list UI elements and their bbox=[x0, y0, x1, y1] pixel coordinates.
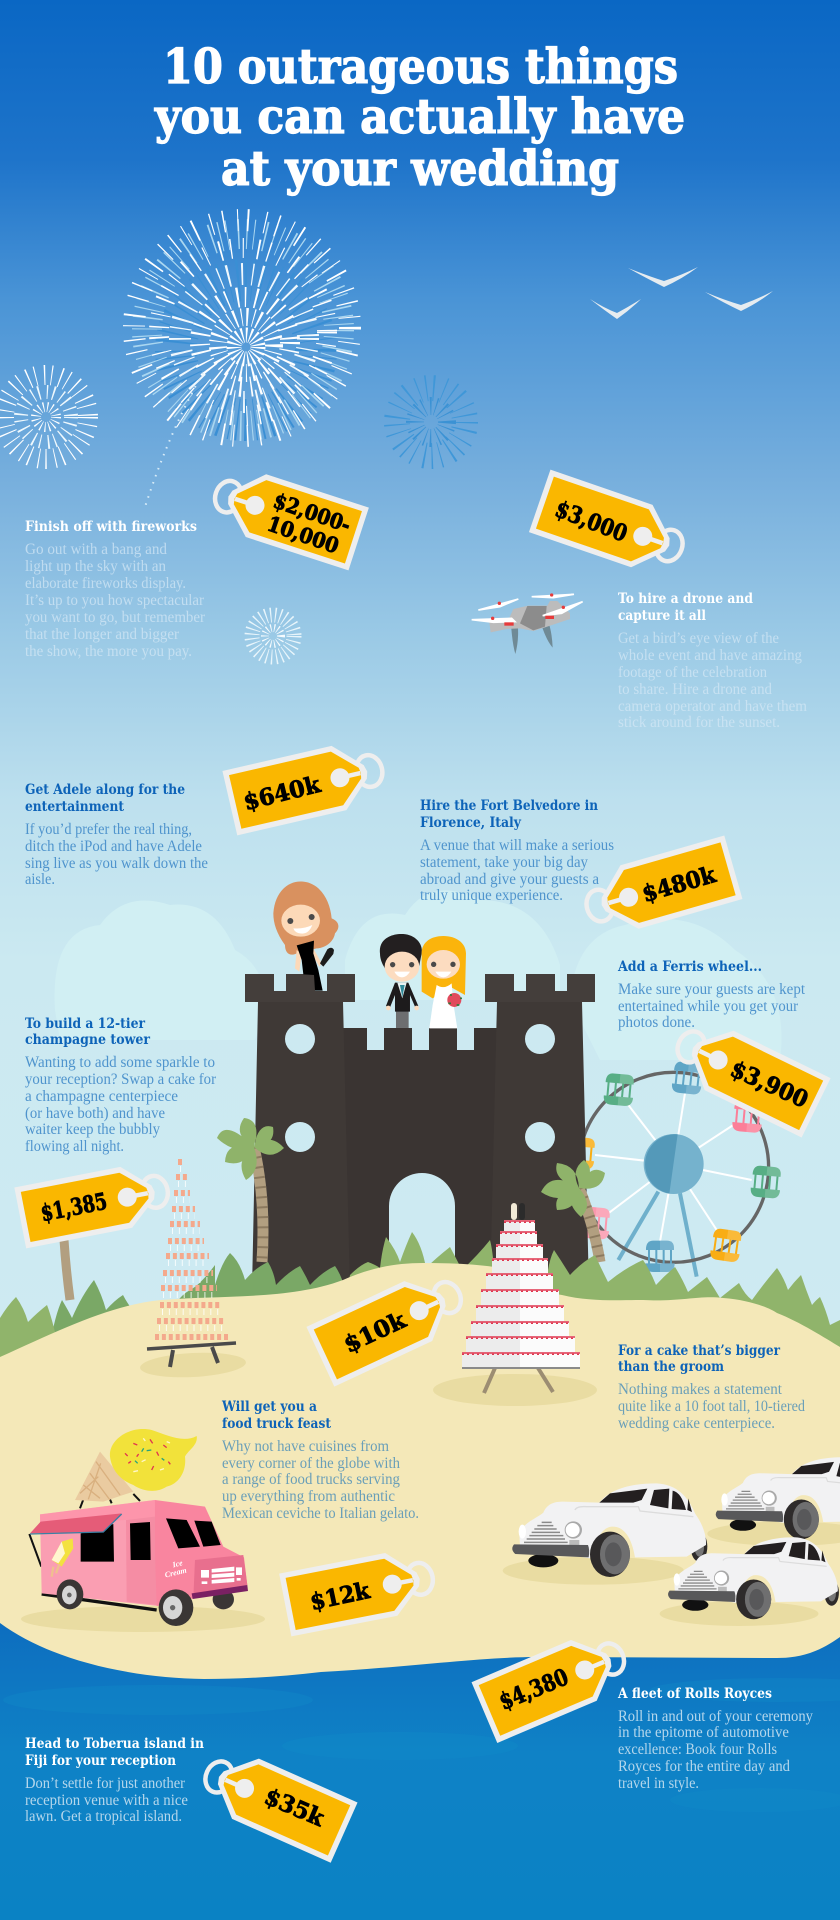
text block: Fort Belvedore: statement, take your big day bbox=[420, 854, 588, 871]
text block: drone: whole event and have amazing bbox=[618, 647, 802, 664]
price tag: food truck: $12k bbox=[308, 1577, 373, 1616]
text block: Fort Belvedore: A venue that will make a serious bbox=[420, 837, 614, 854]
text block: food truck bbox=[221, 1399, 419, 1522]
price tag: Toberua island: $35k bbox=[260, 1783, 329, 1832]
groom bbox=[380, 934, 422, 1028]
title bbox=[154, 39, 685, 197]
price tag: drone: $3,000 bbox=[551, 495, 631, 548]
title: you can actually have bbox=[154, 89, 685, 145]
text block: fireworks: It’s up to you how spectacular bbox=[25, 592, 205, 609]
price tag: cake bbox=[306, 1262, 473, 1387]
sand island bbox=[0, 1263, 840, 1679]
text block: drone: To hire a drone and bbox=[618, 591, 754, 607]
text block: fireworks: elaborate fireworks display. bbox=[25, 575, 186, 592]
text block: Ferris wheel bbox=[617, 959, 806, 1031]
price tag: champagne: $1,385 bbox=[38, 1188, 109, 1227]
price tag: Fort Belvedore bbox=[578, 836, 742, 941]
Adele bbox=[273, 881, 338, 991]
text block: Ferris wheel: Add a Ferris wheel... bbox=[617, 959, 762, 975]
text block: drone: capture it all bbox=[618, 608, 706, 624]
text block: Fort Belvedore: abroad and give your guests a bbox=[420, 871, 599, 888]
text block: Rolls Royces: Roll in and out of your ceremony bbox=[618, 1708, 813, 1725]
text block: Toberua island: lawn. Get a tropical island. bbox=[25, 1808, 182, 1825]
bride bbox=[422, 936, 466, 1028]
text block: Toberua island: Head to Toberua island in bbox=[25, 1736, 204, 1752]
text block: champagne tower: (or have both) and have bbox=[25, 1105, 165, 1122]
text block: Fort Belvedore: truly unique experience. bbox=[420, 887, 563, 904]
title: at your wedding bbox=[221, 141, 619, 197]
firework: left burst bbox=[4, 375, 88, 459]
text block: drone bbox=[618, 591, 808, 731]
truck body: Ice bbox=[171, 1558, 184, 1570]
text block: champagne tower: your reception? Swap a cake for bbox=[25, 1071, 217, 1088]
text block: Toberua island: Don’t settle for just another bbox=[25, 1775, 186, 1792]
water bbox=[0, 1620, 840, 1920]
price tag: Ferris wheel: $3,900 bbox=[726, 1056, 812, 1114]
text block: fireworks: Finish off with fireworks bbox=[25, 519, 197, 535]
ice cream food truck bbox=[21, 1429, 265, 1632]
icon: giant ice cream bbox=[75, 1429, 197, 1508]
text block: food truck: every corner of the globe with bbox=[222, 1455, 400, 1472]
text block: Fort Belvedore: Florence, Italy bbox=[420, 815, 522, 831]
text block: drone: to share. Hire a drone and bbox=[618, 681, 772, 698]
text block: fireworks: light up the sky with an bbox=[25, 558, 166, 575]
text block: Toberua island: reception venue with a nice bbox=[25, 1792, 188, 1809]
rolls royce cars bbox=[503, 1457, 840, 1626]
text block: Adele: aisle. bbox=[25, 871, 55, 888]
text block: drone: camera operator and have them bbox=[618, 698, 808, 715]
text block: champagne tower: waiter keep the bubbly bbox=[25, 1121, 160, 1138]
text block: food truck: Why not have cuisines from bbox=[222, 1438, 390, 1455]
text block: Toberua island: Fiji for your reception bbox=[25, 1753, 176, 1769]
text block: Adele: entertainment bbox=[25, 799, 125, 815]
price tag: Adele bbox=[222, 736, 389, 835]
price tag: Ferris wheel bbox=[665, 1012, 831, 1137]
icon: drone bbox=[472, 593, 583, 654]
firework: large burst bbox=[134, 220, 350, 436]
text block: cake bbox=[618, 1343, 805, 1432]
icon: birds bbox=[590, 267, 773, 319]
title: 10 outrageous things bbox=[163, 39, 678, 95]
truck body: Cream bbox=[164, 1566, 187, 1580]
ferris wheel bbox=[564, 1061, 782, 1277]
text block: food truck: a range of food trucks serving bbox=[222, 1471, 400, 1488]
characters: Adele and the bride and groom bbox=[273, 881, 466, 1028]
text block: Rolls Royces bbox=[617, 1686, 813, 1792]
text block: fireworks: Go out with a bang and bbox=[25, 541, 167, 558]
text block: cake: For a cake that’s bigger bbox=[618, 1343, 781, 1359]
price tag: Rolls Royces: $4,380 bbox=[495, 1664, 572, 1716]
text block: Rolls Royces: A fleet of Rolls Royces bbox=[617, 1686, 772, 1702]
text block: Toberua island bbox=[25, 1736, 204, 1825]
text block: Rolls Royces: in the epitome of automotive bbox=[618, 1724, 789, 1741]
wedding cake bbox=[433, 1203, 597, 1406]
champagne tower bbox=[139, 1162, 247, 1380]
bushes bbox=[0, 1232, 840, 1370]
text block: food truck: food truck feast bbox=[222, 1416, 332, 1432]
text block: cake: wedding cake centerpiece. bbox=[618, 1415, 775, 1432]
text block: champagne tower: champagne tower bbox=[25, 1032, 151, 1048]
text block: champagne tower: Wanting to add some sparkle to bbox=[25, 1054, 215, 1071]
text block: champagne tower bbox=[25, 1016, 217, 1155]
text block: food truck: up everything from authentic bbox=[222, 1488, 395, 1505]
price tag: Fort Belvedore: $480k bbox=[639, 861, 720, 908]
firework: rising trail bbox=[145, 373, 203, 507]
text block: food truck: Will get you a bbox=[221, 1399, 317, 1415]
text block: Adele: Get Adele along for the bbox=[25, 782, 185, 798]
text block: champagne tower: flowing all night. bbox=[25, 1138, 124, 1155]
text block: fireworks: you want to go, but remember bbox=[25, 609, 206, 626]
castle bbox=[245, 974, 595, 1300]
text block: Rolls Royces: Royces for the entire day and bbox=[618, 1758, 790, 1775]
price tag: Toberua island bbox=[194, 1742, 358, 1863]
truck body bbox=[29, 1500, 248, 1626]
text block: fireworks: that the longer and bigger bbox=[25, 626, 180, 643]
price tag: champagne bbox=[14, 1159, 173, 1248]
price tag: Rolls Royces bbox=[472, 1624, 635, 1743]
text block: drone: Get a bird’s eye view of the bbox=[618, 630, 779, 647]
price tag: cake: $10k bbox=[340, 1306, 411, 1359]
text block: fireworks bbox=[25, 519, 206, 660]
price tag: fireworks: $2,000- bbox=[270, 488, 354, 537]
text block: champagne tower: To build a 12-tier bbox=[25, 1016, 146, 1032]
text block: cake: Nothing makes a statement bbox=[618, 1381, 783, 1398]
price tag: fireworks bbox=[206, 461, 369, 570]
text block: Adele: sing live as you walk down the bbox=[25, 855, 208, 872]
text block: Fort Belvedore bbox=[420, 798, 614, 904]
price tag: food truck bbox=[279, 1545, 439, 1636]
text block: champagne tower: a champagne centerpiece bbox=[25, 1088, 178, 1105]
text block: cake: quite like a 10 foot tall, 10-tiered bbox=[618, 1398, 805, 1415]
text block: Ferris wheel: photos done. bbox=[618, 1014, 695, 1031]
text block: Adele bbox=[25, 782, 208, 888]
text block: Ferris wheel: entertained while you get your bbox=[618, 998, 799, 1015]
price tag: drone bbox=[529, 470, 692, 581]
clouds bbox=[55, 890, 782, 1060]
price tag: fireworks: 10,000 bbox=[264, 511, 342, 558]
text block: drone: stick around for the sunset. bbox=[618, 714, 780, 731]
text block: Rolls Royces: excellence: Book four Rolls bbox=[618, 1741, 777, 1758]
text block: fireworks: the show, the more you pay. bbox=[25, 643, 192, 660]
price tag: Adele: $640k bbox=[241, 771, 324, 816]
text block: food truck: Mexican ceviche to Italian gelato. bbox=[222, 1505, 419, 1522]
text block: Ferris wheel: Make sure your guests are kept bbox=[618, 981, 806, 998]
text block: Fort Belvedore: Hire the Fort Belvedore in bbox=[420, 798, 598, 814]
text block: cake: than the groom bbox=[618, 1359, 724, 1375]
text block: Rolls Royces: travel in style. bbox=[618, 1775, 699, 1792]
water highlights bbox=[3, 1678, 840, 1812]
text block: Adele: If you’d prefer the real thing, bbox=[25, 821, 192, 838]
text block: drone: footage of the celebration bbox=[618, 664, 767, 681]
firework: blue burst bbox=[397, 388, 465, 456]
text block: Adele: ditch the iPod and have Adele bbox=[25, 838, 202, 855]
firework: small burst bbox=[252, 615, 294, 657]
palm trees bbox=[64, 1118, 605, 1300]
